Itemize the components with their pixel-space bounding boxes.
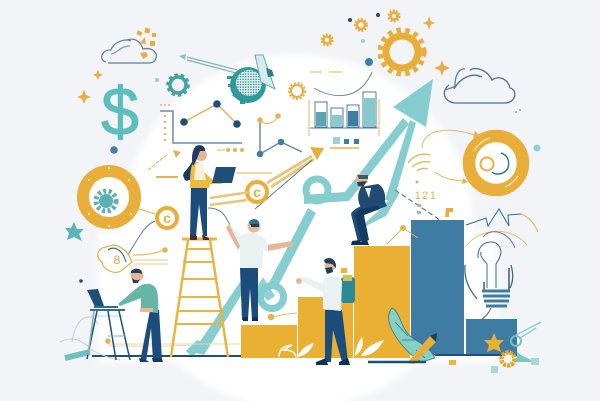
icon: dollar sign bbox=[101, 74, 159, 154]
icon: teal star bbox=[65, 222, 84, 241]
gold wrench coins and dashes bbox=[127, 148, 272, 256]
icon: dollar sign: $ bbox=[101, 74, 139, 150]
icon: light bulb bbox=[465, 232, 515, 320]
small node chart bbox=[257, 113, 302, 157]
icon: sun rays near cloud bbox=[136, 28, 156, 59]
person: seated man bbox=[351, 173, 399, 245]
small gold triangle arrow bbox=[255, 147, 324, 209]
ladder bbox=[171, 239, 228, 357]
person: man at laptop bbox=[87, 268, 163, 362]
person: standing man bbox=[226, 219, 293, 321]
mini bar chart bbox=[309, 58, 379, 148]
right cloud bbox=[444, 69, 521, 113]
person: man with backpack bbox=[296, 258, 355, 365]
gold wrench coins and dashes: c bbox=[253, 184, 261, 200]
left cloud bbox=[102, 28, 156, 63]
arrows and wifi around ring bbox=[408, 130, 480, 184]
arrow trail bbox=[179, 54, 237, 73]
icon: sparkles left bbox=[77, 70, 103, 104]
shoe with pencil and pen bbox=[368, 308, 456, 365]
top gears and sparkles bbox=[322, 10, 450, 76]
connector above bars bbox=[387, 190, 538, 246]
leaves and sprouts bbox=[279, 337, 384, 357]
label 121: 121 bbox=[415, 190, 437, 202]
person: woman with laptop bbox=[183, 145, 236, 240]
gold gear by charts bbox=[289, 83, 305, 99]
line chart with axes bbox=[160, 100, 242, 143]
big gold gear bbox=[380, 30, 424, 74]
big teal growth arrow bbox=[186, 79, 433, 357]
star flower and scissors bbox=[484, 322, 541, 373]
right gold ring bbox=[469, 136, 540, 190]
left gold coin with gear bbox=[83, 167, 135, 227]
yellow and blue bars bbox=[241, 220, 517, 358]
small dot connector bbox=[268, 313, 297, 320]
white background blob bbox=[98, 55, 496, 401]
label 121 bbox=[415, 180, 437, 202]
left cloud with number bbox=[98, 245, 168, 272]
left cloud with number: 8 bbox=[114, 253, 121, 267]
bottom baseline and plants left bbox=[60, 317, 241, 360]
gold wrench coins and dashes: c bbox=[163, 210, 171, 226]
icon: satellite bbox=[179, 54, 275, 104]
icon: teal gear bbox=[168, 74, 188, 96]
laptop table bbox=[87, 310, 130, 360]
